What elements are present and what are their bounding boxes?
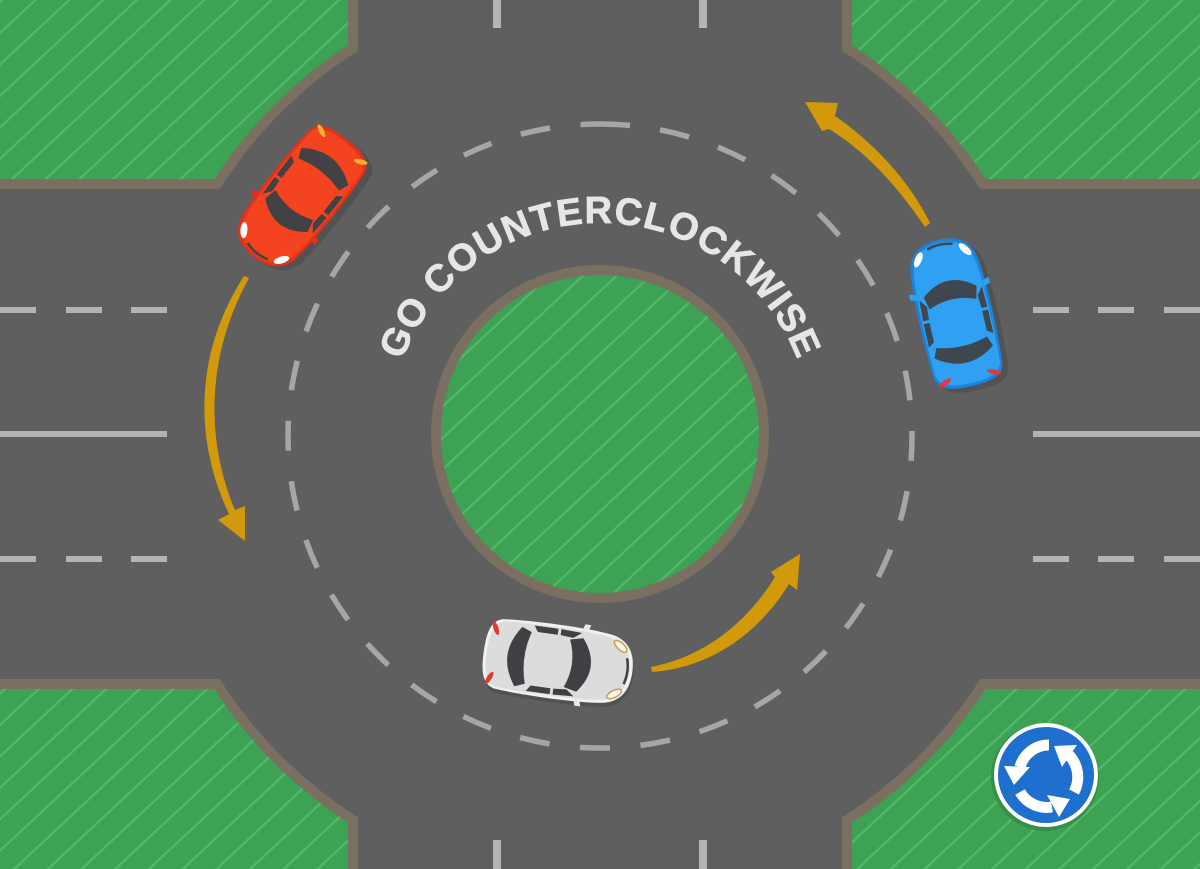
grass corner: bottom right — [847, 684, 1200, 869]
grass corner: top left — [0, 0, 353, 184]
grass corner: bottom left — [0, 684, 353, 869]
shadow: blue car — [908, 236, 1014, 398]
icon: roundabout road sign — [991, 723, 1099, 831]
arrow: top right, following blue car — [805, 102, 930, 227]
grass corner: top right — [847, 0, 1200, 184]
shadow: white car — [480, 619, 638, 713]
central island — [436, 270, 764, 598]
arrow: bottom, following white car — [651, 554, 800, 672]
arrow: left, following red car — [204, 276, 249, 541]
shadow: red car — [230, 120, 382, 284]
car: red — [221, 114, 382, 284]
dashed circular lane line — [288, 124, 912, 748]
car: white — [478, 611, 638, 713]
car: blue — [898, 231, 1014, 398]
body: red car — [221, 114, 379, 282]
body: blue car — [898, 231, 1012, 395]
body: white car — [478, 611, 638, 713]
curved text: go counterclockwise: GO COUNTERCLOCKWISE — [382, 196, 822, 358]
